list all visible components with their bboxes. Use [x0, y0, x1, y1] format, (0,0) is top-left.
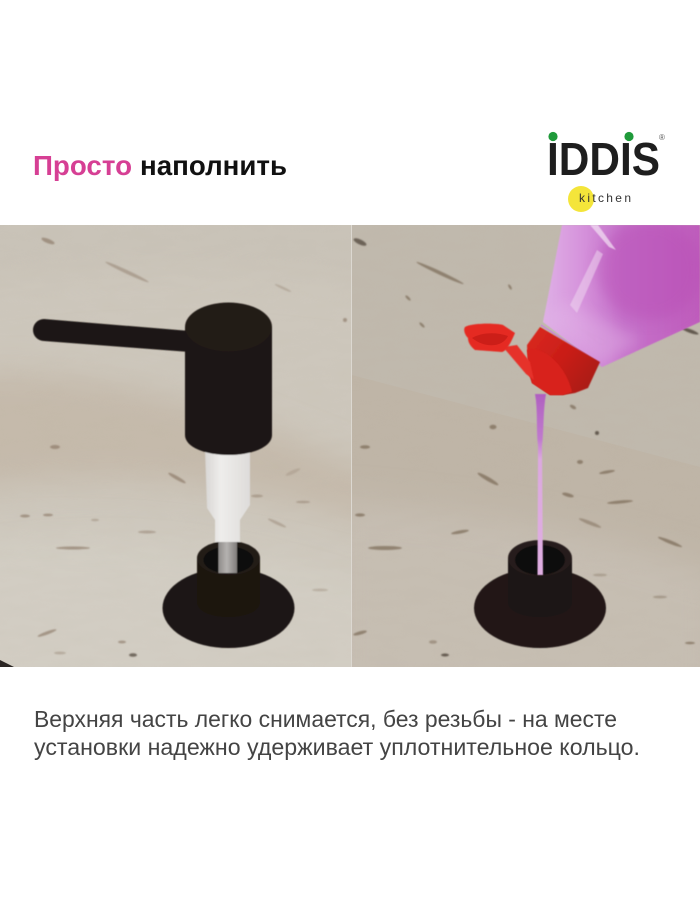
- dispenser arm: [33, 319, 190, 352]
- stone background left: [0, 225, 351, 667]
- description text: установки надежно удерживает уплотнительное кольцо.: [34, 734, 640, 760]
- left photo panel: dispenser assembled on stone counter: [0, 225, 351, 667]
- panel divider: [351, 225, 352, 667]
- logo green dots: [548, 132, 634, 141]
- stone background right: [352, 225, 700, 667]
- counter edge shadow: [0, 660, 14, 667]
- title: наполнить: [140, 150, 287, 181]
- bottle highlight: [570, 250, 603, 313]
- soap stream: [535, 394, 546, 575]
- bottle highlight top: [590, 225, 616, 250]
- soap dispenser assembled: [33, 302, 294, 648]
- dispenser head body: [185, 327, 272, 455]
- stone marks left: [20, 236, 347, 657]
- red cap: [527, 327, 600, 395]
- collar right: [507, 559, 573, 574]
- base flange right: [474, 568, 606, 648]
- logo yellow spot: [568, 186, 594, 212]
- logo wordmark: IDDIS: [547, 133, 660, 185]
- cap shoulder shading: [527, 349, 572, 395]
- description text: [34, 706, 640, 760]
- flip lid inner: [472, 333, 508, 345]
- right photo panel: refilling through the base: [352, 225, 700, 667]
- registered mark: ®: [659, 133, 665, 142]
- title: [33, 150, 287, 181]
- collar: [197, 558, 260, 617]
- bottle neck rim: [541, 325, 601, 364]
- logo kitchen word: kitchen: [579, 191, 631, 205]
- description text: Верхняя часть легко снимается, без резьбы - на месте: [34, 706, 617, 732]
- logo: iddis kitchen: [547, 132, 665, 212]
- base with collar: [474, 540, 606, 648]
- soap bottle: [464, 220, 700, 395]
- cap hinge: [503, 345, 534, 380]
- white tube: [205, 450, 250, 542]
- metal rod: [218, 535, 237, 573]
- stone marks right: [353, 237, 699, 656]
- bottle soft shading: [561, 225, 700, 365]
- base flange: [162, 568, 294, 648]
- title: Просто: [33, 150, 132, 181]
- flip lid: [464, 324, 515, 352]
- dispenser head top: [184, 302, 273, 328]
- bottle body: [543, 225, 700, 367]
